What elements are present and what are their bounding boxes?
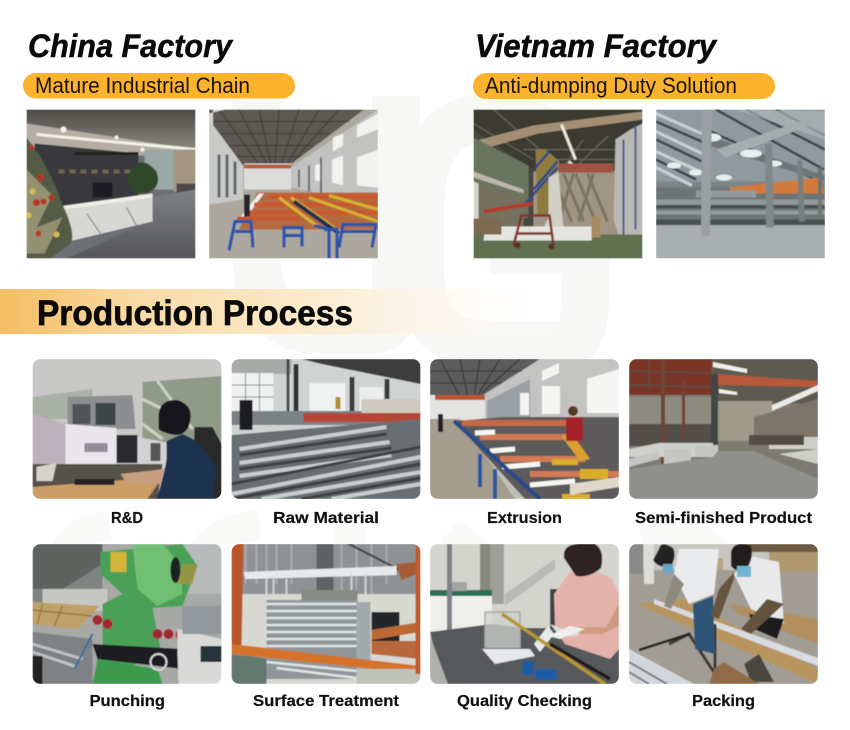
photo: Raw Material bbox=[232, 359, 420, 499]
tagline: Mature Industrial Chain: Mature Industrial Chain bbox=[35, 73, 250, 98]
photo: China factory reception bbox=[26, 110, 196, 258]
photo: Surface Treatment bbox=[232, 544, 420, 684]
photo: R&D bbox=[32, 359, 222, 499]
photo: Vietnam factory warehouse bbox=[656, 110, 825, 258]
label: Raw Material: Raw Material bbox=[273, 510, 379, 527]
section heading band: Production Process bbox=[0, 289, 560, 334]
label: Semi-finished Product: Semi-finished Product bbox=[635, 510, 813, 527]
heading: Vietnam Factory: Vietnam Factory bbox=[475, 28, 718, 64]
photo: Vietnam factory coating line bbox=[474, 110, 642, 258]
label: Extrusion: Extrusion bbox=[487, 510, 562, 527]
photo: Semi-finished Product bbox=[629, 359, 818, 499]
photo: Punching bbox=[32, 544, 222, 684]
photo: Packing bbox=[629, 544, 818, 684]
watermark logo bbox=[60, 96, 740, 590]
photo: China factory extrusion hall bbox=[209, 110, 378, 258]
label: Surface Treatment: Surface Treatment bbox=[253, 693, 400, 710]
section heading band: Production Process: Production Process bbox=[37, 294, 353, 333]
label: Quality Checking: Quality Checking bbox=[457, 693, 592, 710]
label: Punching: Punching bbox=[90, 693, 165, 710]
photo: Quality Checking bbox=[430, 544, 619, 684]
photo: Extrusion bbox=[430, 359, 619, 499]
label: Packing: Packing bbox=[692, 693, 755, 710]
tagline: Anti-dumping Duty Solution: Anti-dumping Duty Solution bbox=[485, 73, 737, 98]
heading: China Factory: China Factory bbox=[28, 28, 234, 64]
label: R&D: R&D bbox=[111, 510, 143, 527]
